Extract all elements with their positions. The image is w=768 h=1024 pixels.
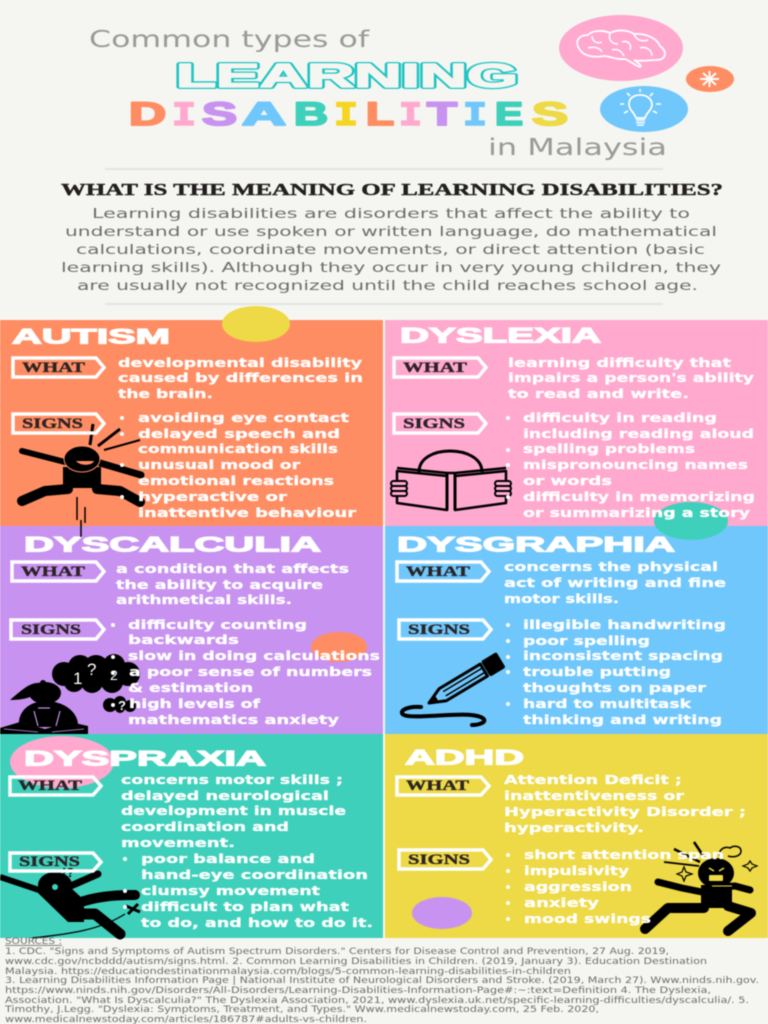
signs tag: SIGNS [408, 622, 470, 638]
signs list: difficulty in memorizing [523, 489, 755, 504]
signs list: poor spelling [523, 633, 650, 648]
signs list: avoiding eye contact [138, 410, 349, 425]
signs list: difficult to plan what [141, 899, 349, 914]
signs list: emotional reactions [138, 473, 334, 488]
signs list: to do, and how to do it. [141, 915, 373, 930]
panel: dysgraphia [385, 526, 768, 734]
title: I [463, 98, 487, 136]
title: D [129, 96, 166, 132]
panel: dyscalculia [0, 526, 383, 734]
what text: developmental disability [118, 355, 362, 370]
signs list: mispronouncing names [523, 457, 748, 472]
what text: a condition that affects [116, 561, 349, 576]
signs list: high levels of [129, 696, 261, 711]
signs list: difficulty counting [128, 617, 307, 632]
title: in Malaysia [488, 135, 667, 161]
sources: Association. "What Is Dyscalculia?" The Dyslexia Association, 2021, www.dyslexia.uk.net/specific-learning-difficulties/dyscalculia/. 5. [5, 996, 749, 1006]
text block: definition: learning skills). Although they occur in very young children, they [61, 260, 721, 276]
panel: dyslexia [385, 320, 768, 540]
what text: act of writing and fine [504, 575, 726, 590]
what tag [10, 777, 101, 795]
signs list: hyperactive or [138, 489, 288, 504]
title: L [366, 96, 394, 132]
sources: SOURCES : [5, 937, 62, 947]
signs tag [399, 850, 491, 869]
signs list: inconsistent spacing [523, 648, 723, 663]
what text: development in muscle [121, 803, 346, 818]
what text [118, 355, 363, 401]
what text [121, 772, 346, 850]
what text [504, 772, 746, 835]
text block: definition: are usually not recognized until the child reaches school age. [77, 278, 698, 294]
signs tag [11, 620, 104, 639]
signs tag [13, 414, 104, 433]
signs list: or summarizing a story [523, 505, 750, 520]
signs list: anxiety [524, 895, 599, 910]
signs list: hand-eye coordination [141, 867, 368, 882]
signs tag [394, 414, 486, 433]
heading: dysgraphia: DYSGRAPHIA [397, 532, 675, 556]
icon: reading book [391, 451, 511, 510]
signs tag: SIGNS [21, 622, 81, 638]
title: B [294, 96, 328, 132]
sources: Timothy, J.Legg. "Dyslexia: Symptoms, Treatment, and Types." Www.medicalnewstoday.com, 25 Feb. 2020, [4, 1005, 599, 1015]
sources: www.cdc.gov/ncbddd/autism/signs.html. 2. Common Learning Disabilities in Children. (2019, January 3). Education Destination [5, 957, 707, 967]
title: S [202, 96, 237, 132]
signs list: mood swings [524, 911, 651, 926]
what text: impairs a person's ability [508, 370, 754, 385]
icon: confused reader: ? [118, 698, 126, 713]
title [89, 27, 667, 161]
sources: 3. Learning Disabilities Information Page | National Institute of Neurological Disorders and Stroke. (2019, March 27). Www.ninds.nih.gov. [5, 976, 759, 986]
what tag: WHAT [406, 564, 470, 580]
signs list: short attention span [524, 847, 724, 862]
signs list [111, 617, 380, 727]
what tag: WHAT [22, 360, 85, 376]
panel: autism [0, 306, 383, 537]
what text: delayed neurological [121, 788, 329, 803]
heading: adhd: ADHD [405, 746, 524, 770]
what text: the brain. [118, 386, 213, 401]
signs list: illegible handwriting [523, 617, 726, 632]
icon: angry figure [645, 842, 757, 931]
signs list: thoughts on paper [523, 680, 707, 695]
what text [116, 561, 349, 607]
what text: coordination and [121, 819, 289, 834]
what text: hyperactivity. [504, 820, 644, 835]
icon: confused reader [0, 654, 140, 734]
signs list: difficulty in reading [523, 410, 717, 425]
signs tag [399, 620, 491, 639]
what tag [394, 358, 486, 377]
signs list: thinking and writing [523, 712, 722, 727]
what tag: WHAT [403, 360, 467, 376]
signs list [123, 851, 373, 930]
heading: autism: AUTISM [12, 324, 170, 348]
signs list: spelling problems [523, 441, 695, 456]
signs list: hard to multitask [523, 696, 692, 711]
heading: what is the meaning: WHAT IS THE MEANING OF LEARNING DISABILITIES? [61, 180, 723, 199]
what text: motor skills. [504, 591, 619, 606]
signs tag: SIGNS [22, 416, 83, 432]
what text: the ability to acquire [116, 577, 323, 592]
signs list: impulsivity [524, 863, 629, 878]
signs list: inattentive behaviour [138, 505, 357, 520]
what text: concerns the physical [504, 559, 718, 574]
signs list: a poor sense of numbers [129, 664, 372, 679]
icon: confused reader: ? [87, 660, 96, 679]
signs list: unusual mood or [138, 457, 301, 472]
heading: dyslexia: DYSLEXIA [400, 324, 601, 348]
signs tag: SIGNS [408, 852, 470, 868]
signs list: mathematics anxiety [128, 712, 339, 727]
signs list: clumsy movement [141, 883, 320, 898]
what text: inattentiveness or [504, 788, 685, 803]
signs list: slow in doing calculations [128, 648, 380, 663]
sources: https://www.ninds.nih.gov/Disorders/All-Disorders/Learning-Disabilities-Information-Page#:~:text=Definition 4. The Dyslexia, [5, 986, 711, 996]
what text: Attention Deficit ; [504, 772, 682, 787]
title: I [399, 98, 422, 136]
what tag: WHAT [21, 564, 85, 580]
icon: falling figure: !? [62, 865, 74, 880]
what text: movement. [121, 835, 235, 850]
signs list: delayed speech and [138, 426, 340, 441]
title: T [427, 96, 458, 132]
icon: jumping figure [22, 424, 141, 537]
what text: Hyperactivity Disorder ; [504, 804, 746, 819]
signs list: aggression [524, 879, 632, 894]
heading: dyscalculia: DYSCALCULIA [24, 532, 321, 556]
signs list: poor balance and [141, 851, 315, 866]
signs list [506, 617, 726, 727]
panel: adhd [385, 734, 768, 938]
what text: caused by differences in [118, 370, 363, 385]
text block: definition: Learning disabilities are disorders that affect the ability to [92, 206, 690, 222]
title: I [334, 98, 358, 136]
what tag [397, 777, 489, 795]
text block: definition: understand or use spoken or written language, do mathematical [65, 224, 717, 240]
icon: pencil [402, 652, 506, 725]
sources [4, 937, 759, 1024]
signs list: backwards [128, 632, 239, 647]
signs list: or words [523, 473, 612, 488]
what tag: WHAT [18, 778, 82, 794]
icon: confused reader: 1 [73, 669, 82, 688]
title: LEARNING [176, 57, 518, 94]
what text [504, 559, 726, 606]
icon: asterisk [686, 66, 734, 92]
what tag: WHAT [406, 778, 469, 794]
title: S [532, 96, 568, 132]
icon: light bulb [600, 86, 688, 132]
what tag [397, 562, 489, 581]
signs list [506, 410, 755, 520]
what text: learning difficulty that [508, 355, 731, 370]
title: A [242, 96, 286, 132]
signs list: trouble putting [523, 664, 671, 679]
icon: brain [559, 15, 683, 81]
icon: confused reader: 2 [110, 667, 118, 683]
what text: concerns motor skills ; [121, 772, 343, 787]
what text: arithmetical skills. [116, 592, 292, 607]
title: I [172, 98, 196, 136]
sources: Malaysia. https://educationdestinationmalaysia.com/blogs/5-common-learning-disabilities-in-children [5, 967, 571, 977]
title: Common types of [89, 27, 370, 53]
title: LEARNING [176, 57, 518, 94]
signs list: including reading aloud [523, 426, 754, 441]
heading: dyspraxia: DYSPRAXIA [24, 746, 266, 770]
what tag [12, 562, 104, 581]
text block: definition: calculations, coordinate movements, or direct attention (basic [76, 242, 705, 258]
icon: falling figure [0, 865, 140, 938]
signs tag: SIGNS [403, 416, 465, 432]
what text: to read and write. [508, 386, 689, 401]
panel: dyspraxia [0, 734, 383, 938]
signs list: communication skills [138, 441, 338, 456]
title: E [495, 96, 523, 132]
signs tag [10, 853, 101, 871]
signs tag: SIGNS [19, 854, 80, 870]
signs list [120, 410, 357, 520]
signs list [506, 847, 724, 926]
what text [508, 355, 754, 401]
signs list: & estimation [128, 680, 253, 695]
text block: definition [61, 206, 721, 294]
sources: 1. CDC. "Signs and Symptoms of Autism Spectrum Disorders." Centers for Disease Control and Prevention, 27 Aug. 2019, [5, 947, 669, 957]
what tag [13, 358, 104, 377]
